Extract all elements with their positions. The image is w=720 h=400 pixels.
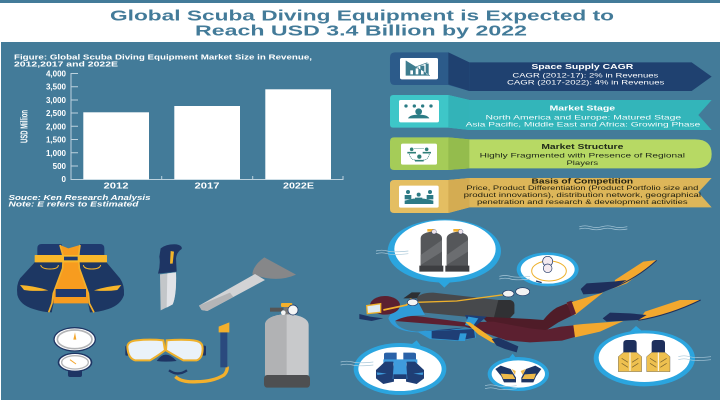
chart heading [14, 52, 312, 68]
title [110, 8, 614, 40]
card: Market Structure [390, 137, 712, 170]
icon: team [405, 190, 433, 204]
source note: Souce: Ken Research Analysis [8, 193, 150, 202]
card: Market Structure: Highly Fragmented with Presence of Regional [480, 153, 686, 160]
card: Basis of Competition: penetration and research & development activities [477, 199, 688, 206]
y axis labels: 3,500 [46, 82, 67, 92]
title: Global Scuba Diving Equipment is Expected to [110, 8, 614, 24]
callout: gauge hose [517, 252, 579, 286]
callout: fins [594, 326, 695, 386]
y axis labels: 500 [53, 162, 67, 171]
panel: market size chart [8, 52, 343, 208]
y axis labels: 3,000 [46, 96, 67, 105]
card: Space Supply CAGR [390, 52, 712, 91]
card: Market Stage: Asia Pacific, Middle East and Africa: Growing Phase [466, 122, 701, 129]
chart heading: Figure: Global Scuba Diving Equipment Market Size in Revenue, [14, 52, 312, 62]
upper fin [567, 292, 603, 315]
x axis labels: 2022E [283, 182, 315, 190]
x axis labels: 2017 [194, 182, 220, 190]
icon: torch [199, 257, 296, 311]
y axis title: USD Million [18, 110, 30, 143]
icon: buoyancy vest [17, 244, 124, 312]
panel: diving equipment [17, 244, 310, 388]
upper leg [482, 301, 576, 332]
icon: audience [404, 104, 433, 118]
card: Market Stage: North America and Europe: Matured Stage [485, 114, 682, 121]
card: Space Supply CAGR: Space Supply CAGR [531, 64, 633, 71]
callout: gloves [488, 354, 549, 391]
y axis labels: 1,000 [46, 149, 67, 158]
card: Basis of Competition: product innovations), distribution network, geographical [464, 192, 701, 199]
callout: twin tanks [388, 219, 501, 288]
lower leg and body [395, 316, 584, 342]
arm [465, 322, 507, 346]
y axis labels: 1,500 [46, 136, 67, 144]
bars [83, 89, 331, 179]
card: Basis of Competition [390, 178, 712, 213]
y axis labels: 4,000 [46, 70, 67, 78]
card: Market Stage [390, 95, 712, 130]
lower fin [573, 321, 623, 337]
axes [71, 74, 343, 180]
card: Market Stage: Market Stage [549, 106, 615, 113]
callout: vest [354, 340, 446, 395]
jacket [388, 302, 476, 341]
icon: mask and snorkel [125, 322, 229, 382]
icon: knife [158, 244, 182, 310]
icon: growth chart [406, 61, 430, 75]
source note: Note: E refers to Estimated [8, 200, 139, 208]
y axis labels: 2,000 [46, 122, 67, 132]
panel: diver illustration [341, 219, 711, 395]
decorative water ripples [341, 226, 711, 389]
icon: gauges [53, 327, 96, 377]
panel: right info cards [390, 52, 712, 213]
x axis labels: 2012 [104, 182, 129, 190]
y axis labels: 0 [62, 175, 67, 184]
head [370, 296, 400, 315]
tank [417, 293, 514, 322]
chart heading: 2012,2017 and 2022E [14, 60, 118, 68]
icon: air tank [264, 303, 310, 388]
card: Market Structure: Market Structure [541, 144, 623, 151]
regulator hose [417, 294, 507, 302]
card: Basis of Competition: Basis of Competition [531, 179, 633, 186]
card: Basis of Competition: Price, Product Differentiation (Product Portfolio size and [466, 185, 699, 192]
icon: diver [359, 260, 701, 352]
icon: players network [407, 148, 431, 161]
y axis labels [46, 70, 67, 184]
source note [8, 193, 150, 208]
card: Space Supply CAGR: CAGR (2012-17): 2% in Revenues [512, 72, 659, 79]
card: Market Structure: Players [566, 160, 599, 167]
title: Reach USD 3.4 Billion by 2022 [195, 22, 527, 40]
card: Space Supply CAGR: CAGR (2017-2022): 4% in Revenues [507, 79, 665, 86]
x axis labels [104, 182, 315, 190]
y axis labels: 2,500 [46, 109, 67, 118]
